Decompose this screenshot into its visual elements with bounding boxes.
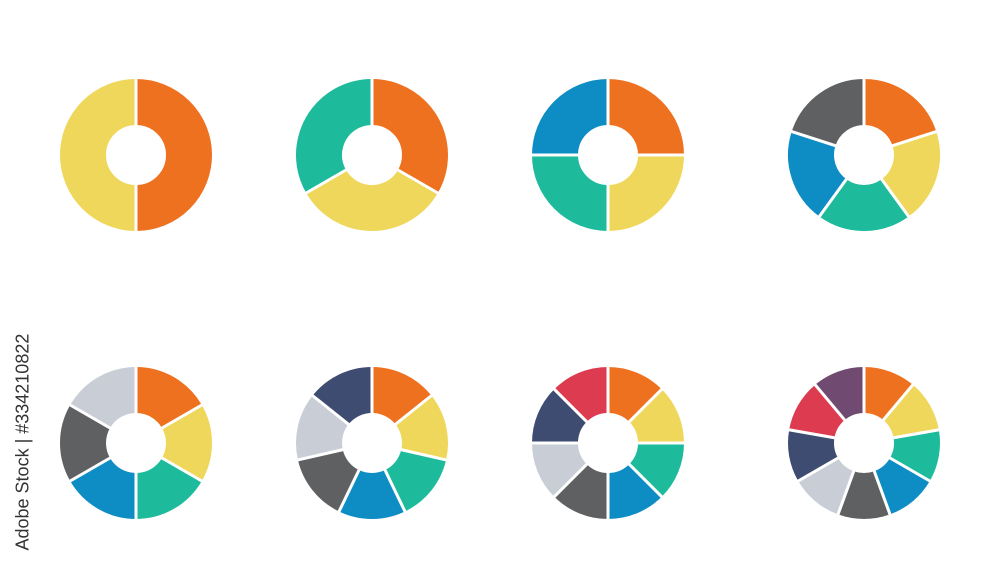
donut: 7 segments xyxy=(294,363,450,517)
donut: 4 segments xyxy=(528,75,688,235)
donut: 6 segments xyxy=(64,363,208,523)
stock id text: Adobe Stock | #334210822 xyxy=(12,334,32,550)
donut: 8 segments xyxy=(528,363,688,523)
donut: 2 segments xyxy=(83,75,189,235)
donut: 5 segments xyxy=(788,75,940,229)
donut: 9 segments xyxy=(785,363,943,518)
donut: 3 segments xyxy=(300,75,444,227)
